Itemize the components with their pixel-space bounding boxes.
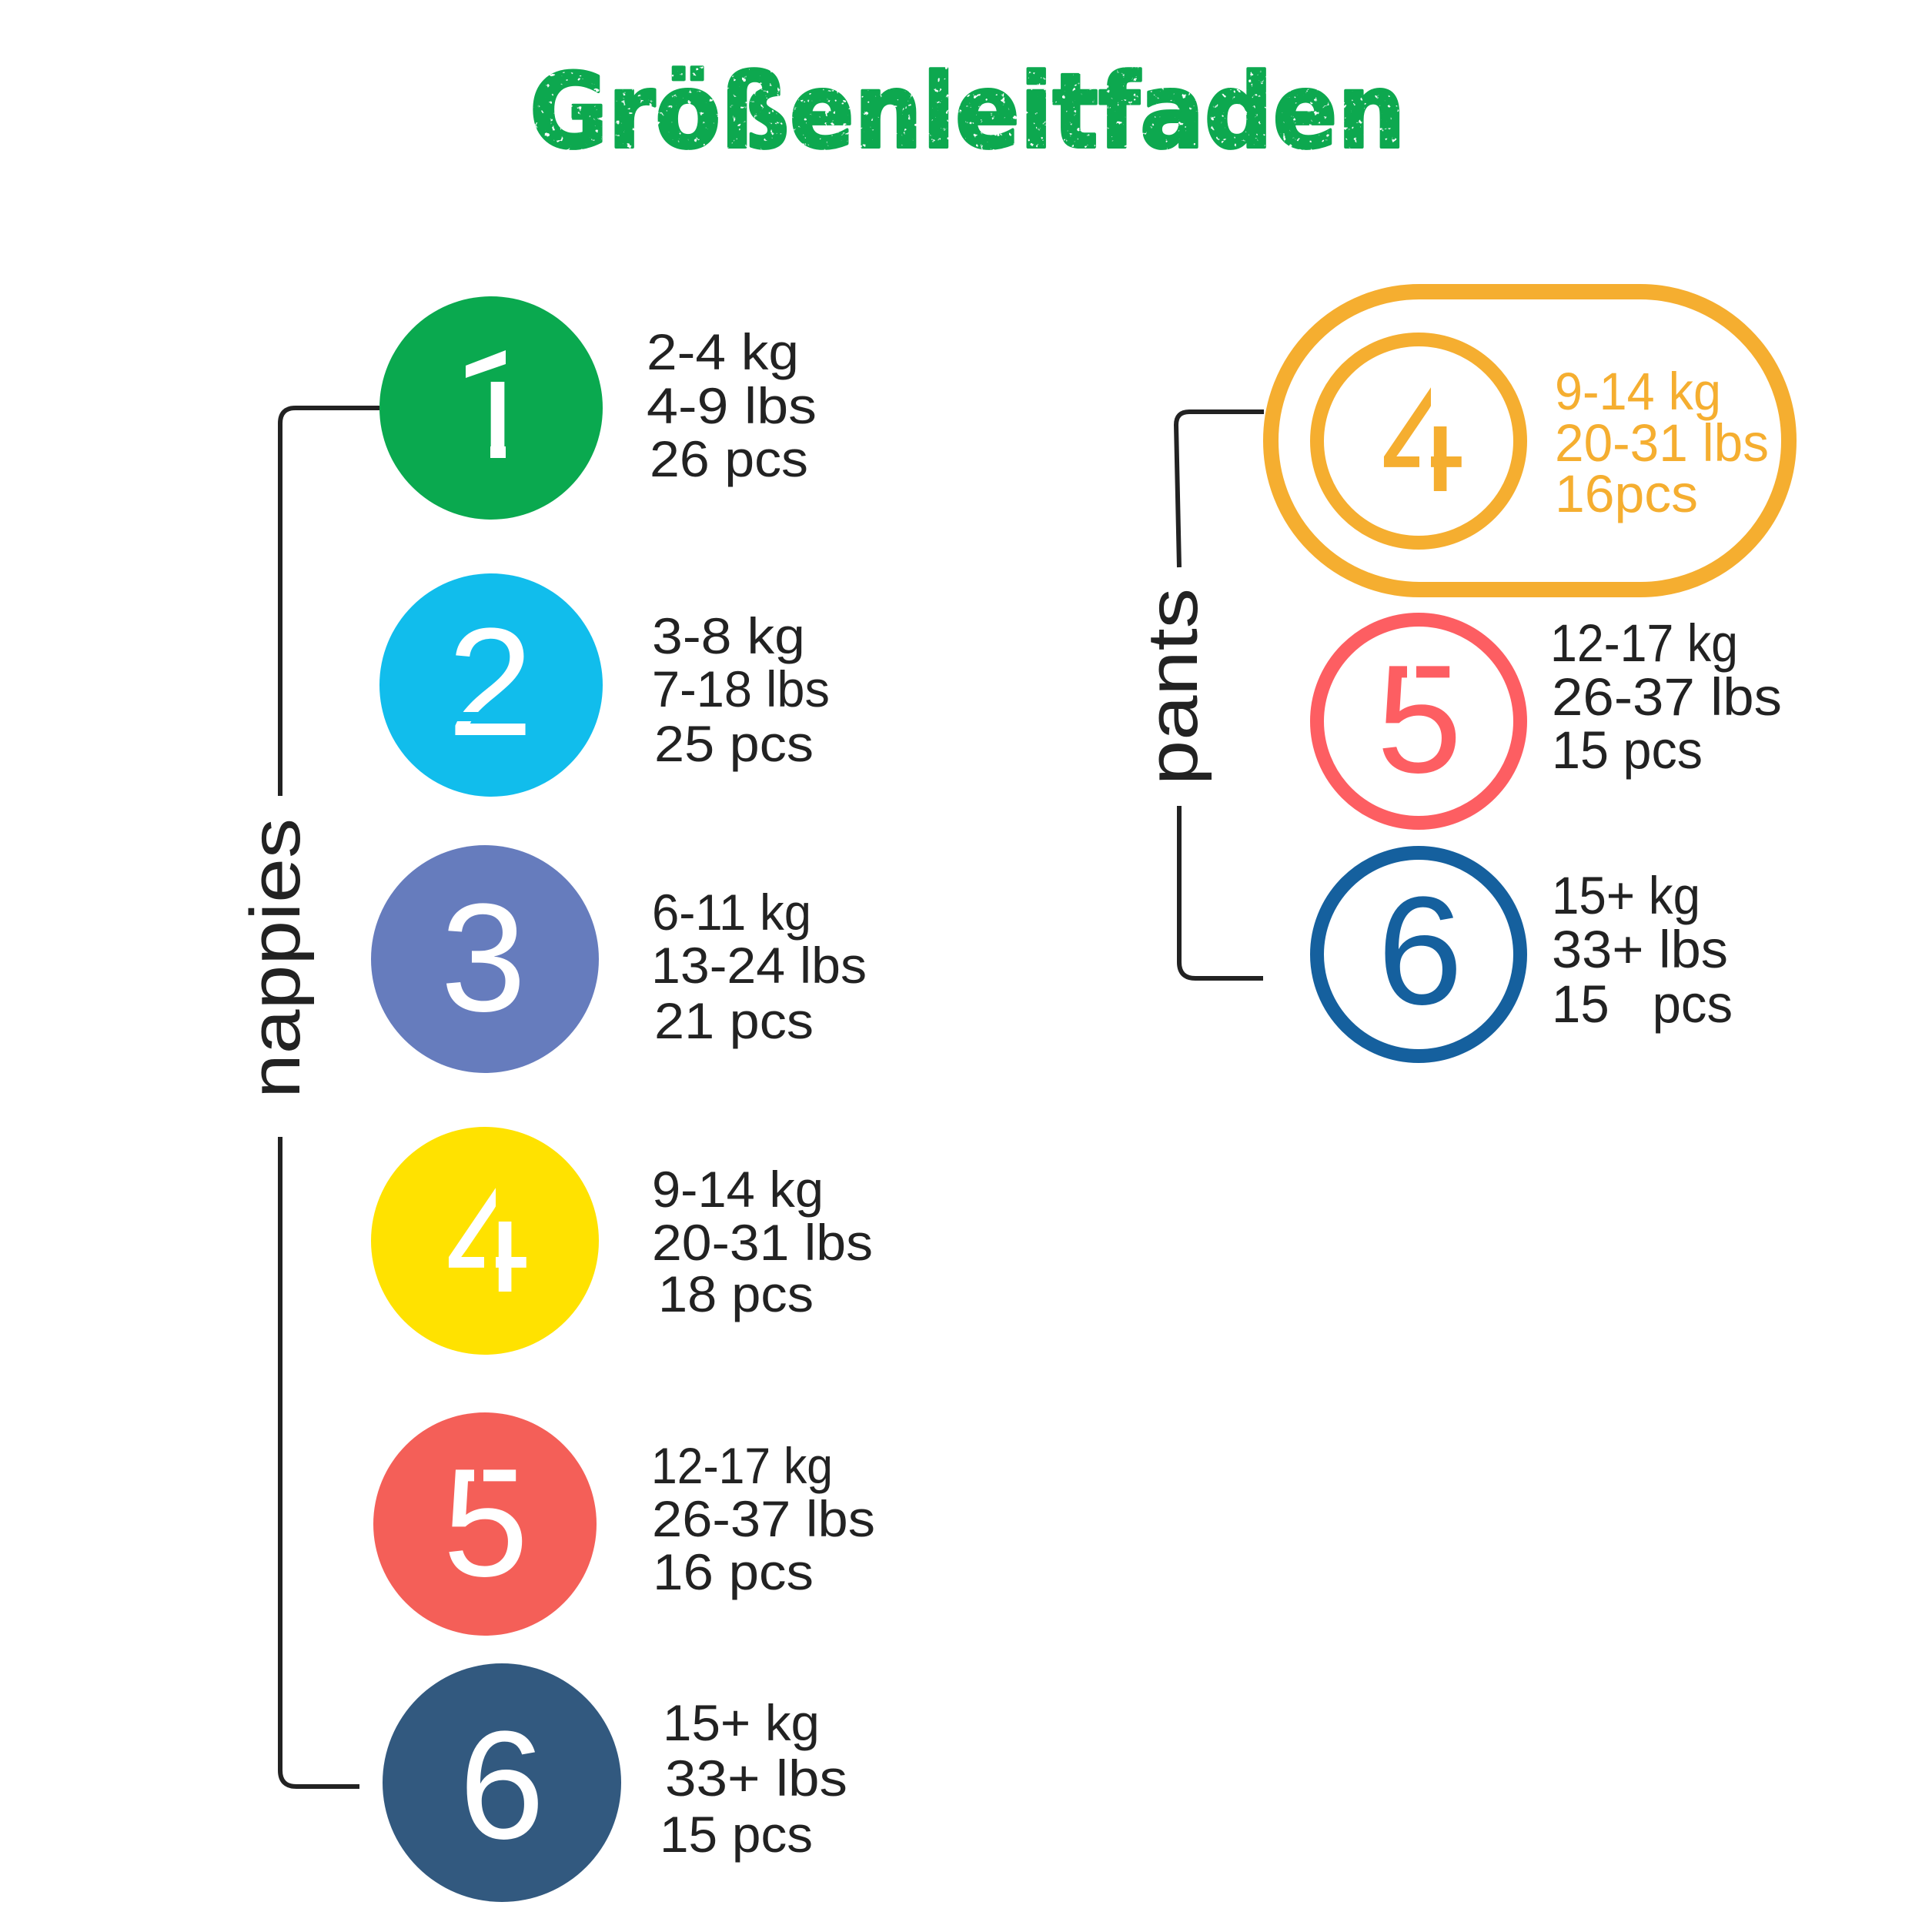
panel: nappies size 5: 12-17 kg — [651, 1437, 833, 1494]
panel: pants size 6: 33+ lbs — [1552, 920, 1728, 979]
panel: nappies size 4 — [371, 1127, 873, 1355]
panel: nappies size 6 — [383, 1663, 847, 1902]
panel: nappies size 4: 20-31 lbs — [652, 1214, 873, 1271]
panel: pants size 4 highlighted: 9-14 kg — [1555, 362, 1721, 421]
panel: nappies size 3 — [371, 845, 867, 1073]
panel: nappies size 2 — [379, 573, 830, 797]
panel: nappies size 3: 6-11 kg — [652, 884, 811, 941]
panel: nappies size 1: 4-9 lbs — [647, 377, 817, 434]
panel: pants size 6: 15 pcs — [1552, 974, 1733, 1034]
panel: nappies size 2: 7-18 lbs — [652, 660, 830, 717]
panel: pants size 6: 15+ kg — [1552, 866, 1700, 925]
panel: nappies size 2: 25 pcs — [654, 715, 814, 772]
panel: nappies size 5: 5 — [443, 1437, 529, 1609]
panel: pants size 4 highlighted: 20-31 lbs — [1555, 413, 1769, 473]
panel: nappies size 4: 18 pcs — [658, 1265, 814, 1322]
panel: nappies size 3: 3 — [440, 872, 526, 1044]
panel: pants size 5: 15 pcs — [1552, 720, 1703, 780]
panel: pants size 6: 6 — [1377, 865, 1463, 1037]
panel: nappies size 3: 13-24 lbs — [651, 937, 867, 994]
title: Größenleitfaden — [530, 52, 1406, 172]
panel: nappies size 1: 2-4 kg — [647, 323, 799, 380]
panel: nappies size 3: 21 pcs — [654, 992, 814, 1049]
panel: nappies size 1: 26 pcs — [650, 430, 808, 487]
panel: pants size 4 highlighted — [1271, 292, 1789, 590]
panel: pants size 6 — [1317, 853, 1733, 1056]
panel: nappies size 2: 3-8 kg — [652, 607, 805, 664]
label: nappies: nappies — [236, 818, 315, 1098]
panel: nappies size 2: 2 — [447, 597, 533, 768]
panel: pants size 5: 26-37 lbs — [1552, 667, 1782, 727]
panel: pants size 5: 5 — [1376, 633, 1462, 805]
panel: nappies size 1 — [379, 296, 817, 520]
panel: pants size 5 — [1317, 613, 1782, 823]
panel: pants size 5: 12-17 kg — [1550, 613, 1738, 673]
panel: nappies size 6: 15 pcs — [660, 1806, 813, 1863]
panel: nappies bracket — [236, 408, 379, 1787]
panel: nappies size 6: 6 — [459, 1700, 545, 1871]
panel: pants size 4 highlighted: 4 — [1380, 353, 1466, 524]
panel: nappies size 5 — [373, 1412, 875, 1636]
panel: nappies size 5: 16 pcs — [653, 1543, 814, 1600]
panel: nappies size 4: 4 — [445, 1153, 531, 1325]
panel: nappies size 4: 9-14 kg — [652, 1161, 824, 1218]
label: pants: pants — [1134, 588, 1212, 785]
panel: nappies size 5: 26-37 lbs — [652, 1490, 875, 1547]
panel: pants bracket — [1134, 412, 1264, 978]
panel: pants size 4 highlighted: 16pcs — [1555, 464, 1698, 523]
panel: nappies size 6: 33+ lbs — [665, 1750, 847, 1807]
panel: nappies size 1: 1 — [452, 319, 538, 491]
panel: nappies size 6: 15+ kg — [663, 1694, 820, 1751]
